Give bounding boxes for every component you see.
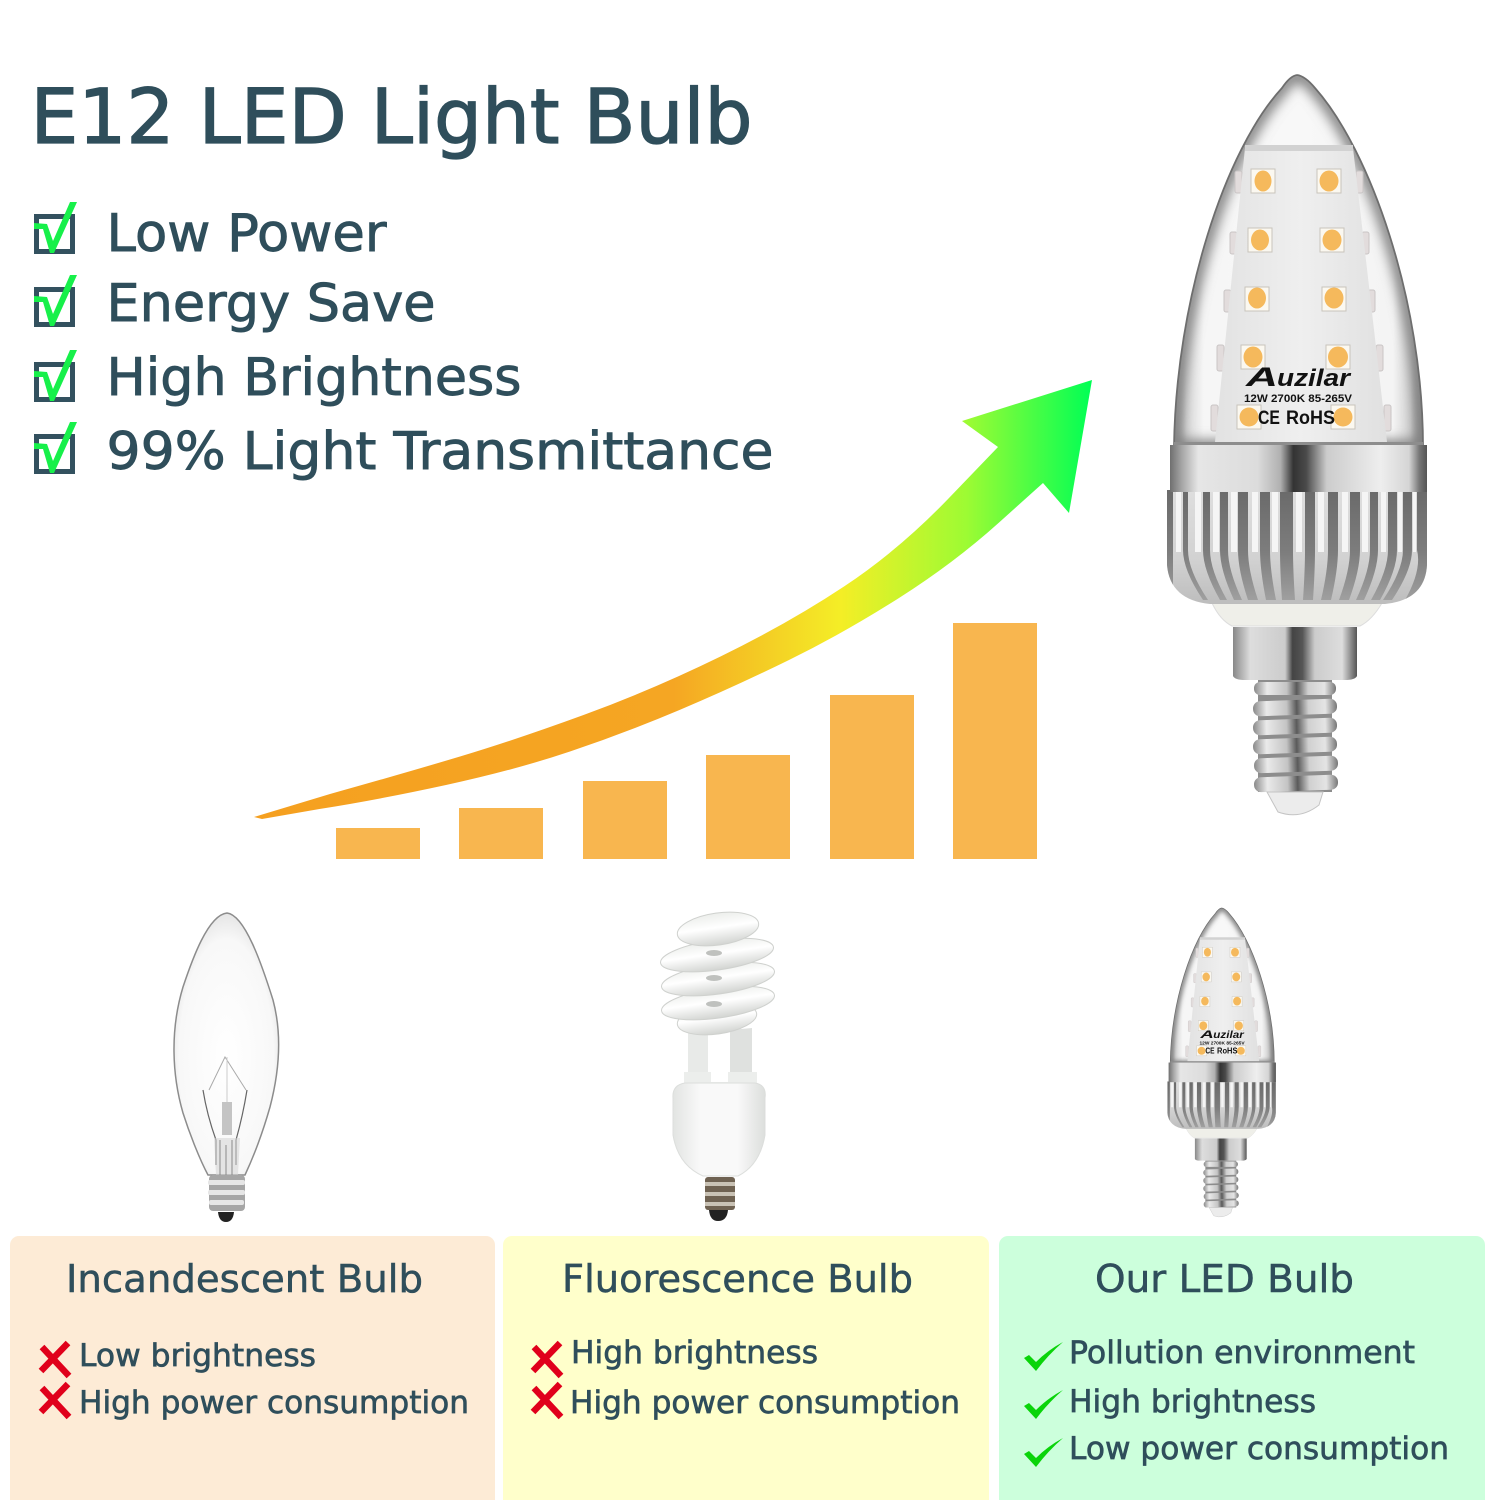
item: high power consumption: High power consumption	[79, 1385, 469, 1421]
item: low power consumption: Low power consumption	[1069, 1431, 1449, 1467]
incandescent bulb illustration	[174, 913, 279, 1222]
panel: our LED bulb	[999, 1236, 1485, 1500]
small LED bulb illustration: 12W 2700K 85-265V	[1199, 1041, 1246, 1046]
cross icon: high power	[41, 1384, 69, 1417]
feature checklist	[34, 202, 774, 482]
title: E12 LED Light Bulb	[30, 73, 752, 161]
check icon: low power	[1024, 1438, 1063, 1467]
feature: light transmittance: 99% Light Transmittance	[106, 422, 774, 482]
feature: low power: Low Power	[106, 204, 387, 264]
large LED bulb: uzilar	[1277, 365, 1352, 392]
item: high brightness: High brightness	[1069, 1384, 1316, 1420]
item: pollution environment: Pollution environment	[1069, 1335, 1415, 1371]
cross icon: high power	[533, 1384, 561, 1417]
small LED bulb illustration: A	[1199, 1029, 1214, 1041]
fluorescent spiral bulb illustration	[658, 907, 777, 1221]
feature: energy save: Energy Save	[106, 274, 436, 334]
check icon: pollution	[1024, 1342, 1063, 1371]
item: high power consumption: High power consumption	[570, 1385, 960, 1421]
panel heading: incandescent: Incandescent Bulb	[66, 1257, 423, 1302]
large LED bulb	[1167, 75, 1427, 815]
large LED bulb: CE	[1258, 408, 1280, 429]
cross icon: high brightness	[533, 1343, 561, 1376]
feature: high brightness: High Brightness	[106, 348, 522, 408]
panel heading: fluorescence: Fluorescence Bulb	[562, 1257, 913, 1302]
small LED bulb illustration	[1167, 908, 1276, 1217]
panel: fluorescence bulb	[503, 1236, 989, 1500]
item: high brightness: High brightness	[571, 1335, 818, 1371]
panel heading: our LED: Our LED Bulb	[1095, 1257, 1354, 1302]
large LED bulb: RoHS	[1286, 408, 1335, 429]
panel: incandescent bulb	[10, 1236, 495, 1500]
check icon: high brightness	[1024, 1390, 1063, 1419]
bar chart	[336, 623, 1037, 859]
large LED bulb: 12W 2700K 85-265V	[1244, 393, 1353, 405]
small LED bulb illustration: RoHS	[1217, 1047, 1237, 1056]
large LED bulb: A	[1244, 362, 1278, 392]
cross icon: low brightness	[41, 1343, 69, 1376]
small LED bulb illustration: uzilar	[1213, 1030, 1245, 1041]
rising gradient arrow	[254, 380, 1092, 819]
small LED bulb illustration: CE	[1205, 1047, 1215, 1056]
item: low brightness: Low brightness	[79, 1338, 316, 1374]
